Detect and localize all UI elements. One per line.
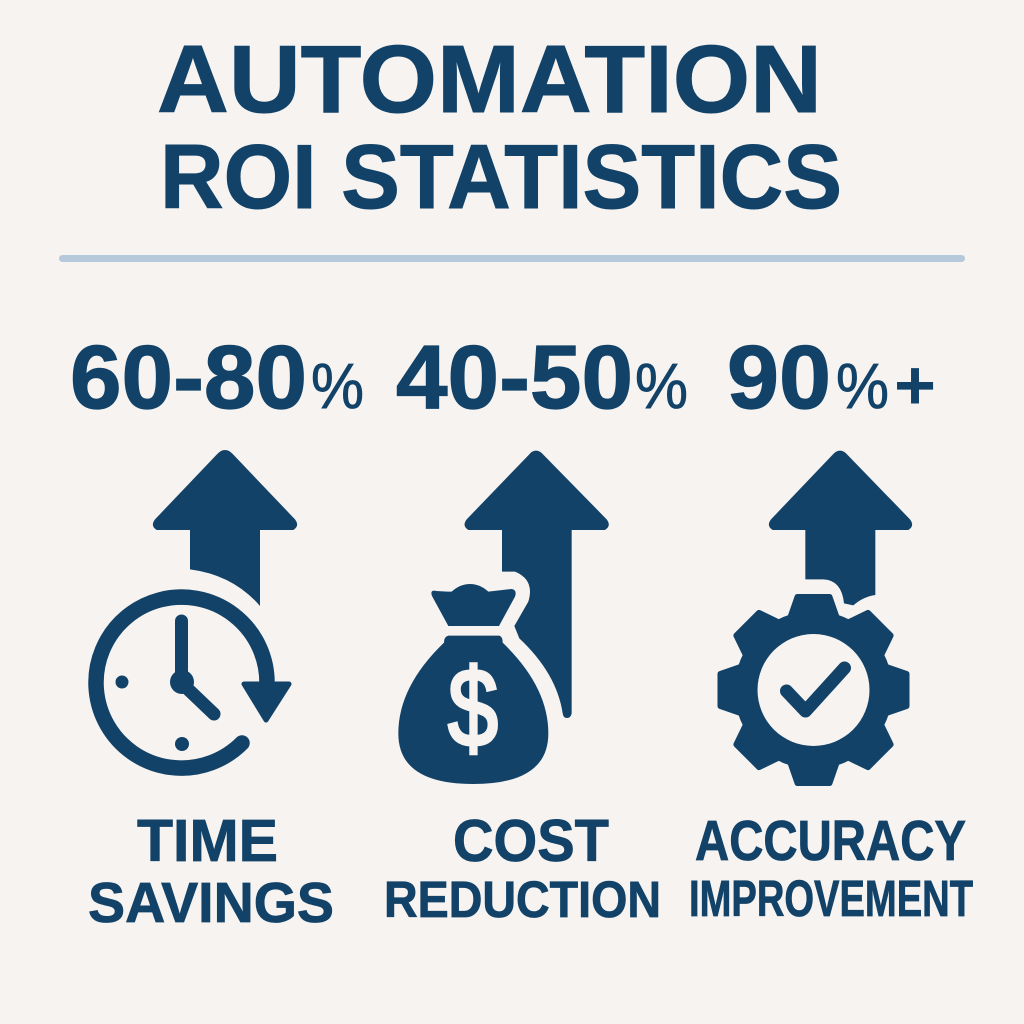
- title: AUTOMATION: [157, 26, 822, 133]
- title: [157, 26, 842, 228]
- stat: 90%+: [727, 328, 936, 428]
- icon: gear with check mark: [720, 597, 906, 783]
- stat: 90%+: %: [836, 350, 889, 422]
- stat: 90%+: +: [894, 346, 936, 424]
- label: cost reduction: [384, 808, 661, 928]
- label: cost reduction: REDUCTION: [384, 871, 661, 928]
- label: time savings: [88, 808, 334, 935]
- icon: money bag: $: [448, 647, 498, 770]
- icon: clock: [96, 597, 289, 768]
- icon: up arrow: [153, 450, 297, 606]
- label: time savings: TIME: [137, 808, 278, 874]
- panel: time savings: [70, 328, 364, 935]
- stat: 90%+: 90: [727, 328, 831, 428]
- panel: cost reduction: [384, 328, 688, 928]
- icon: up arrow: [769, 451, 912, 605]
- label: cost reduction: COST: [453, 808, 609, 874]
- icon: money bag: [398, 584, 548, 784]
- label: accuracy improvement: ACCURACY: [695, 809, 966, 873]
- stat: 60-80%: 60-80: [70, 328, 307, 428]
- label: accuracy improvement: [689, 809, 973, 927]
- icon: up arrow: [465, 451, 609, 718]
- stat: 40-50%: %: [635, 350, 688, 422]
- stat: 60-80%: %: [311, 350, 364, 422]
- title: ROI STATISTICS: [160, 127, 842, 228]
- stat: 40-50%: 40-50: [396, 328, 633, 428]
- panel: accuracy improvement: [689, 328, 973, 927]
- label: time savings: SAVINGS: [88, 871, 334, 935]
